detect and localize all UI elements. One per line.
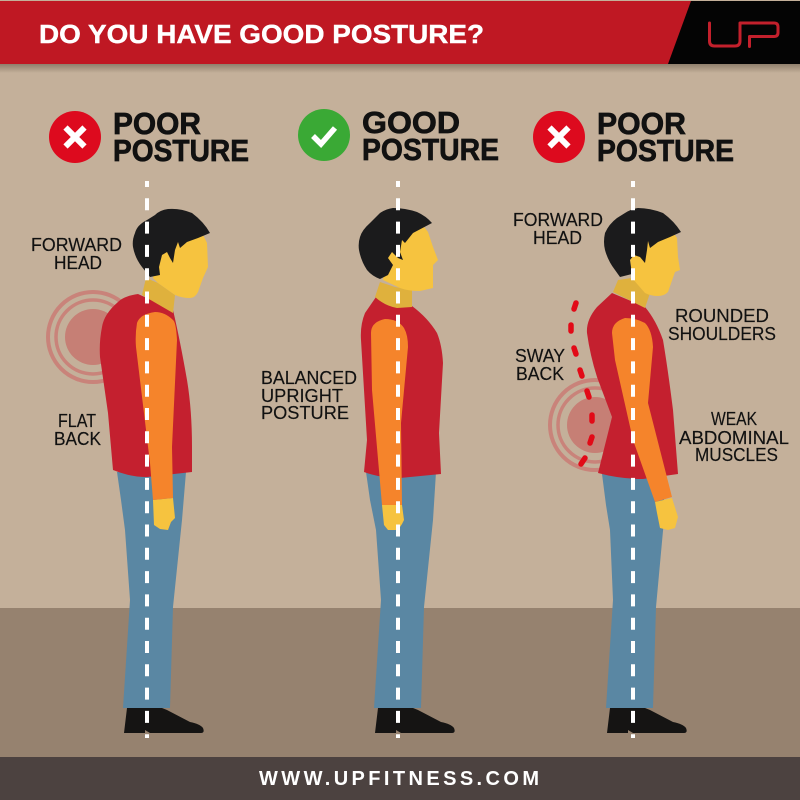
plumb line right bbox=[631, 181, 635, 738]
heading: poor posture left: POOR bbox=[113, 106, 201, 141]
arm bbox=[371, 319, 408, 505]
heading: poor posture right: POSTURE bbox=[597, 133, 734, 168]
shoe bbox=[375, 708, 455, 733]
heading: good posture: GOOD bbox=[362, 105, 460, 140]
title: DO YOU HAVE GOOD POSTURE? bbox=[39, 19, 484, 49]
sway back curve bbox=[571, 303, 592, 464]
label: sway back: SWAY bbox=[515, 346, 565, 366]
label: weak abdominal muscles: ABDOMINAL bbox=[679, 428, 789, 448]
torso bbox=[587, 293, 678, 479]
pain circle: upper back bbox=[48, 292, 138, 382]
shoe bbox=[124, 708, 204, 733]
legs bbox=[117, 472, 186, 708]
shoe bbox=[607, 708, 687, 733]
arm bbox=[612, 318, 672, 502]
label: sway back bbox=[515, 346, 565, 384]
label: forward head left: FORWARD bbox=[31, 235, 122, 255]
arm bbox=[136, 312, 177, 500]
label: weak abdominal muscles: MUSCLES bbox=[695, 445, 778, 465]
label: rounded shoulders: SHOULDERS bbox=[668, 324, 776, 344]
label: forward head left: HEAD bbox=[54, 253, 102, 273]
label: flat back: BACK bbox=[54, 429, 101, 449]
hand bbox=[382, 505, 404, 530]
label: rounded shoulders: ROUNDED bbox=[675, 306, 769, 326]
label: forward head right: HEAD bbox=[533, 228, 582, 248]
label: forward head right bbox=[513, 210, 603, 248]
neck bbox=[142, 278, 175, 313]
figure: good posture bbox=[359, 208, 455, 733]
neck bbox=[375, 282, 412, 308]
label: forward head right: FORWARD bbox=[513, 210, 603, 230]
plumb line centre bbox=[396, 181, 400, 738]
label: balanced upright posture: BALANCED bbox=[261, 368, 357, 388]
hand bbox=[153, 498, 175, 530]
header banner bbox=[0, 1, 800, 64]
icon: red cross bbox=[533, 111, 585, 163]
label: flat back bbox=[54, 411, 101, 449]
face bbox=[383, 222, 438, 291]
heading: poor posture left bbox=[49, 106, 249, 168]
neck bbox=[613, 278, 650, 308]
legs bbox=[366, 472, 436, 708]
figure: sway back bbox=[587, 208, 687, 733]
hair bbox=[604, 208, 681, 277]
footer bbox=[0, 757, 800, 800]
heading: good posture bbox=[298, 105, 499, 167]
hair bbox=[133, 209, 210, 277]
plumb line left bbox=[145, 181, 149, 738]
label: rounded shoulders bbox=[668, 306, 776, 344]
legs bbox=[602, 474, 664, 708]
hand bbox=[655, 498, 678, 530]
torso bbox=[100, 294, 192, 477]
floor bbox=[0, 608, 800, 758]
heading: poor posture right: POOR bbox=[597, 106, 686, 141]
label: weak abdominal muscles bbox=[679, 409, 789, 465]
icon: green check bbox=[298, 109, 350, 161]
heading: poor posture left: POSTURE bbox=[113, 133, 249, 168]
label: balanced upright posture: POSTURE bbox=[261, 403, 349, 423]
heading: poor posture right bbox=[533, 106, 734, 168]
figure: flat back bbox=[100, 209, 210, 733]
pain circle: lower back bbox=[550, 380, 640, 470]
label: weak abdominal muscles: WEAK bbox=[711, 409, 757, 429]
label: balanced upright posture bbox=[261, 368, 357, 423]
heading: good posture: POSTURE bbox=[362, 132, 499, 167]
face bbox=[630, 225, 680, 296]
website: WWW.UPFITNESS.COM bbox=[259, 768, 539, 790]
label: sway back: BACK bbox=[516, 364, 564, 384]
logo: UP bbox=[710, 23, 778, 46]
torso bbox=[361, 297, 443, 478]
icon: red cross bbox=[49, 111, 101, 163]
face bbox=[153, 225, 208, 298]
label: flat back: FLAT bbox=[58, 411, 96, 431]
label: balanced upright posture: UPRIGHT bbox=[261, 386, 343, 406]
label: forward head left bbox=[31, 235, 122, 273]
hair bbox=[359, 208, 432, 279]
